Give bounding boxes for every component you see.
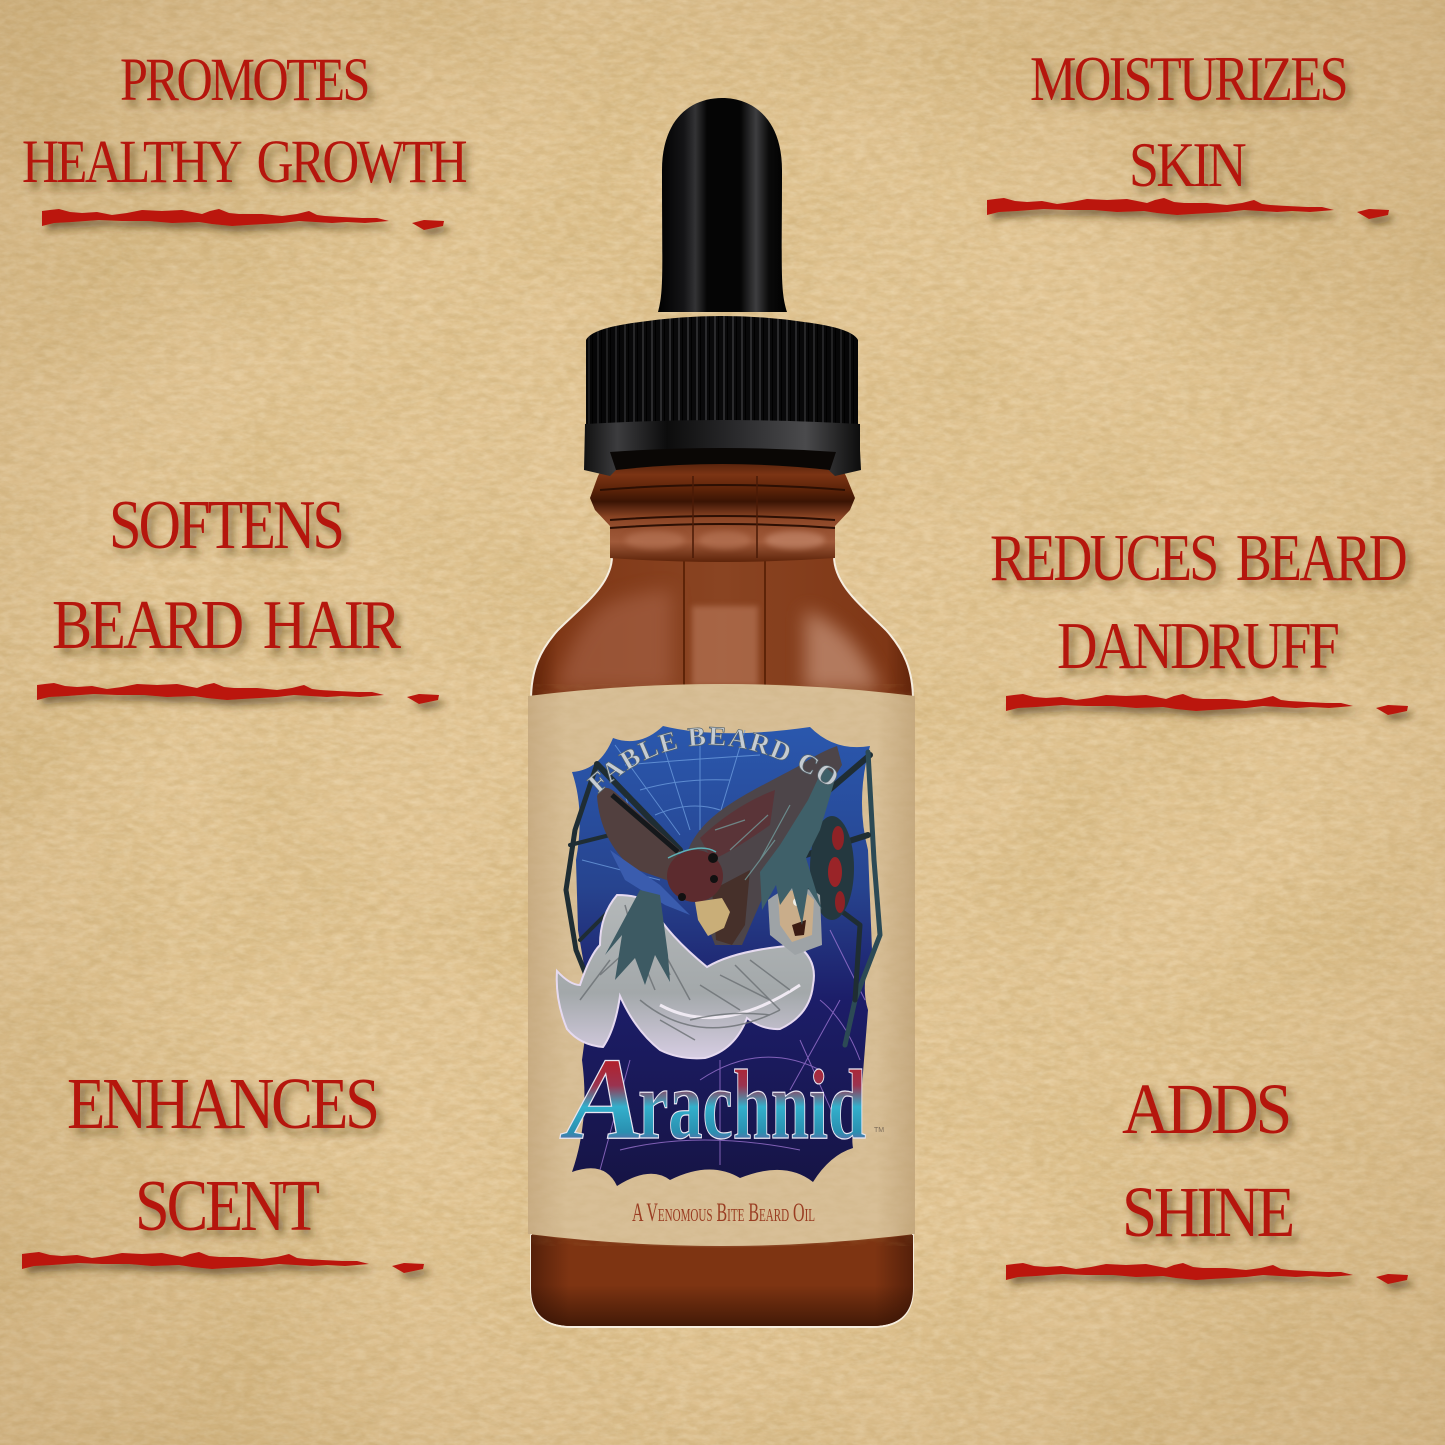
- cap collar ring: [584, 420, 861, 476]
- heading line: healthy growth: HEALTHY GROWTH: [22, 129, 467, 196]
- bottle base below label: [531, 1235, 913, 1326]
- heading line: softens: SOFTENS: [109, 487, 342, 564]
- benefit: softens beard hair: [37, 487, 439, 704]
- ribbed dropper cap: [584, 316, 861, 476]
- benefit: moisturizes skin: [987, 43, 1389, 219]
- heading line: promotes: PROMOTES: [120, 47, 368, 114]
- heading line: shine: SHINE: [1122, 1172, 1293, 1252]
- bottle glass body: [531, 556, 913, 1327]
- label art: right spider hand: [760, 766, 836, 925]
- heading line: beard hair: BEARD HAIR: [52, 587, 401, 664]
- label art: victim face and hair: [768, 888, 822, 955]
- heading line: moisturizes: MOISTURIZES: [1030, 43, 1346, 114]
- product name: Arachnid: rachnid: [638, 1049, 866, 1160]
- glass shoulder highlights: [556, 561, 880, 690]
- red brush underline: [987, 198, 1389, 219]
- brand arc text: FABLE BEARD CO: [586, 726, 838, 794]
- product name: Arachnid: A: [559, 1033, 645, 1164]
- dropper rubber bulb: [658, 98, 787, 312]
- label art: webbed cocoon: [557, 895, 814, 1058]
- label art: spider head: [667, 848, 723, 902]
- heading line: adds: ADDS: [1122, 1069, 1289, 1149]
- kraft paper label: [528, 684, 915, 1246]
- heading line: dandruff: DANDRUFF: [1057, 609, 1338, 683]
- red brush underline: [1006, 694, 1408, 715]
- product: amber dropper bottle: [528, 98, 915, 1328]
- product tagline: A Venomous Bite Beard Oil: [632, 1198, 815, 1227]
- label art: left spider hand: [605, 890, 670, 985]
- label art: spider abdomen: [810, 816, 854, 920]
- label art: spider legs: [566, 752, 880, 1045]
- label art: spider front leg: [597, 788, 690, 915]
- label art: spider fangs: [695, 898, 730, 936]
- heading line: scent: SCENT: [135, 1165, 320, 1246]
- benefit: enhances scent: [22, 1063, 424, 1273]
- red brush underline: [37, 683, 439, 704]
- label art: spider body: [685, 746, 842, 945]
- benefit: reduces beard dandruff: [990, 521, 1408, 715]
- heading line: skin: SKIN: [1129, 129, 1246, 200]
- trademark mark: TM: [874, 1127, 884, 1134]
- label art: web backdrop: [572, 726, 872, 1186]
- red brush underline: [22, 1252, 424, 1273]
- benefit: promotes healthy growth: [22, 47, 467, 230]
- heading line: enhances: ENHANCES: [67, 1063, 377, 1144]
- red brush underline: [42, 209, 444, 230]
- benefit: adds shine: [1006, 1069, 1408, 1284]
- red brush underline: [1006, 1263, 1408, 1284]
- label art: spider web strands: [582, 730, 865, 1170]
- bottle neck: [590, 450, 855, 562]
